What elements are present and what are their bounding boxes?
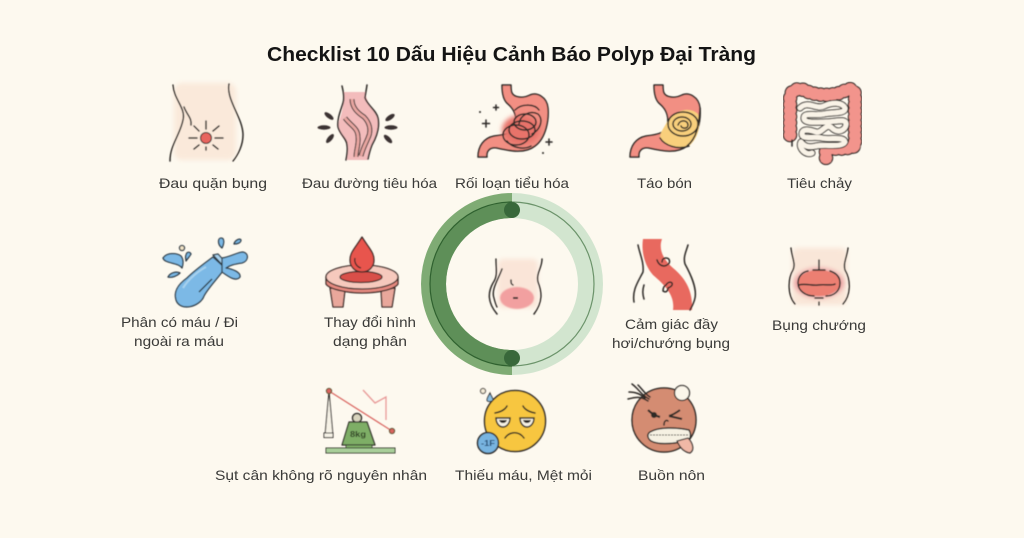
icon: tired face: [478, 388, 546, 454]
label: bloated feeling: hơi/chướng bụng: [612, 335, 730, 351]
label: nausea: Buồn nôn: [638, 467, 705, 483]
label: bloated feeling: Cảm giác đầy: [625, 316, 718, 332]
icon: bloated abdomen: [789, 248, 849, 305]
label: diarrhea: Tiêu chảy: [787, 175, 852, 191]
icon: constipation stomach: [630, 85, 700, 157]
icon: blood drop on table: [326, 237, 398, 307]
icon: center abdomen: [489, 259, 542, 314]
label: abdominal cramp: Đau quặn bụng: [159, 175, 267, 191]
label: digestive tract pain: Đau đường tiêu hóa: [302, 175, 437, 191]
icon: digestive disorder stomach: [478, 85, 552, 157]
label: abdominal distension: Bụng chướng: [772, 317, 866, 333]
label: unexplained weight loss: Sụt cân không rõ nguyên nhân: [215, 467, 427, 483]
label: constipation: Táo bón: [637, 175, 692, 191]
label: blood in stool: Phân có máu / Đi: [121, 314, 238, 330]
icon: blue bottle and splashes: [163, 238, 247, 307]
label: stool shape change: Thay đổi hình: [324, 314, 416, 330]
label: stool shape change: [324, 314, 416, 349]
title: Checklist 10 Dấu Hiệu Cảnh Báo Polyp Đại Tràng: [267, 44, 756, 66]
icon: abdominal cramp: [170, 83, 243, 161]
icon: weight scale: 8kg: [350, 430, 366, 439]
icon: weight scale: [324, 388, 395, 453]
label: bloated feeling: [612, 316, 730, 351]
label: anemia and fatigue: Thiếu máu, Mệt mỏi: [455, 467, 592, 483]
label: stool shape change: dạng phân: [333, 333, 407, 349]
icon: nausea face: [628, 384, 696, 453]
label: blood in stool: [121, 314, 238, 349]
label: digestive disorder: Rối loạn tiểu hóa: [455, 175, 569, 191]
icon: tired face: -1F: [481, 439, 495, 448]
icon: colon for diarrhea: [790, 89, 855, 162]
label: blood in stool: ngoài ra máu: [134, 333, 224, 349]
chart: central progress ring: [421, 193, 603, 375]
icon: digestive tract pain: [318, 85, 398, 160]
icon: gas intestine tube: [634, 239, 695, 310]
